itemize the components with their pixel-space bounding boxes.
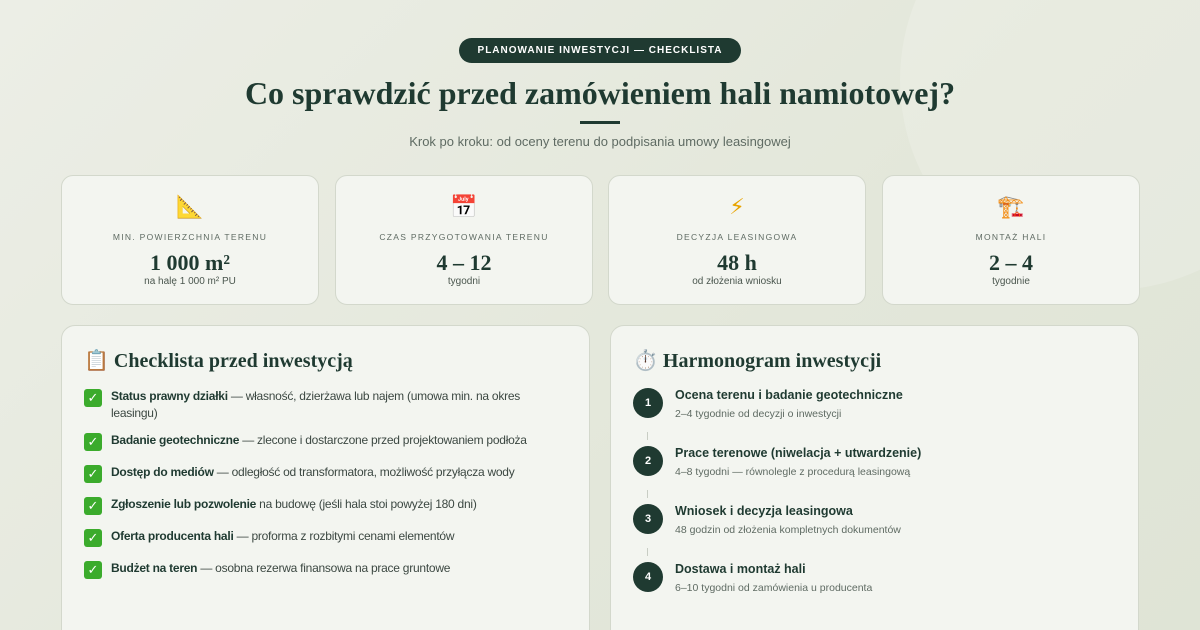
step 4: 6–10 tygodni od zamówienia u producenta [675,582,872,594]
card: assembly: tygodnie [992,276,1030,287]
step 2: 2 [645,455,651,467]
item 2: Badanie geotechniczne — zlecone i dostarczone przed projektowaniem podłoża [111,433,527,447]
card: prep time: tygodni [448,276,480,287]
subtitle: Krok po kroku: od oceny terenu do podpisania umowy leasingowej [409,134,791,149]
panel: timeline [610,325,1139,630]
item 5: ✓ [88,530,98,545]
step 2: Prace terenowe (niwelacja + utwardzenie) [675,446,921,460]
card: min area: 1 000 m² [150,250,230,275]
step 3: 3 [645,513,651,525]
item 2: ✓ [88,434,98,449]
step 1: Ocena terenu i badanie geotechniczne [675,388,903,402]
card: leasing decision: DECYZJA LEASINGOWA [677,232,797,242]
step 3: 48 godzin od złożenia kompletnych dokumentów [675,524,901,536]
card: leasing decision: ⚡ [729,194,745,219]
item 6: Budżet na teren — osobna rezerwa finansowa na prace gruntowe [111,561,450,575]
card: leasing decision: od złożenia wniosku [692,276,782,287]
item 4: ✓ [88,498,98,513]
step 3: Wniosek i decyzja leasingowa [675,504,853,518]
step 4: Dostawa i montaż hali [675,562,806,576]
step 1: 2–4 tygodnie od decyzji o inwestycji [675,408,841,420]
item 3: Dostęp do mediów — odległość od transformatora, możliwość przyłącza wody [111,465,514,479]
step 2 [633,446,921,478]
item 6: ✓ [88,562,98,577]
card: min area [61,175,319,305]
title: Co sprawdzić przed zamówieniem hali namiotowej? [245,75,955,111]
item 1: Status prawny działki — własność, dzierżawa lub najem (umowa min. na okres leasingu) [111,389,520,420]
item 5: Oferta producenta hali — proforma z rozbitymi cenami elementów [111,529,454,543]
step 4: 4 [645,571,651,583]
step 1 [633,388,903,420]
card: leasing decision: 48 h [717,250,757,275]
card: prep time: 📅 [450,194,478,219]
card: prep time: 4 – 12 [436,250,492,275]
item 3: ✓ [88,466,98,481]
card: leasing decision [608,175,866,305]
heading: checklist: 📋 Checklista przed inwestycją [84,350,353,372]
item 4: Zgłoszenie lub pozwolenie na budowę (jeśli hala stoi powyżej 180 dni) [111,497,477,511]
card: min area: MIN. POWIERZCHNIA TERENU [113,232,267,242]
card: assembly: 2 – 4 [989,250,1033,275]
card: min area: na halę 1 000 m² PU [144,276,236,287]
card: min area: 📐 [176,194,204,219]
card: prep time: CZAS PRZYGOTOWANIA TERENU [379,232,549,242]
step 2: 4–8 tygodni — równolegle z procedurą leasingową [675,466,910,478]
heading: timeline: ⏱️ Harmonogram inwestycji [633,350,881,372]
pill label [459,38,741,63]
card: prep time [335,175,593,305]
card: assembly: 🏗️ [997,194,1025,219]
card: assembly: MONTAŻ HALI [976,232,1046,242]
item 1: ✓ [88,390,98,405]
pill label: PLANOWANIE INWESTYCJI — CHECKLISTA [478,45,722,56]
panel: checklist [61,325,590,630]
step 1: 1 [645,397,651,409]
card: assembly [882,175,1140,305]
step 3 [633,504,901,536]
step 4 [633,562,872,594]
